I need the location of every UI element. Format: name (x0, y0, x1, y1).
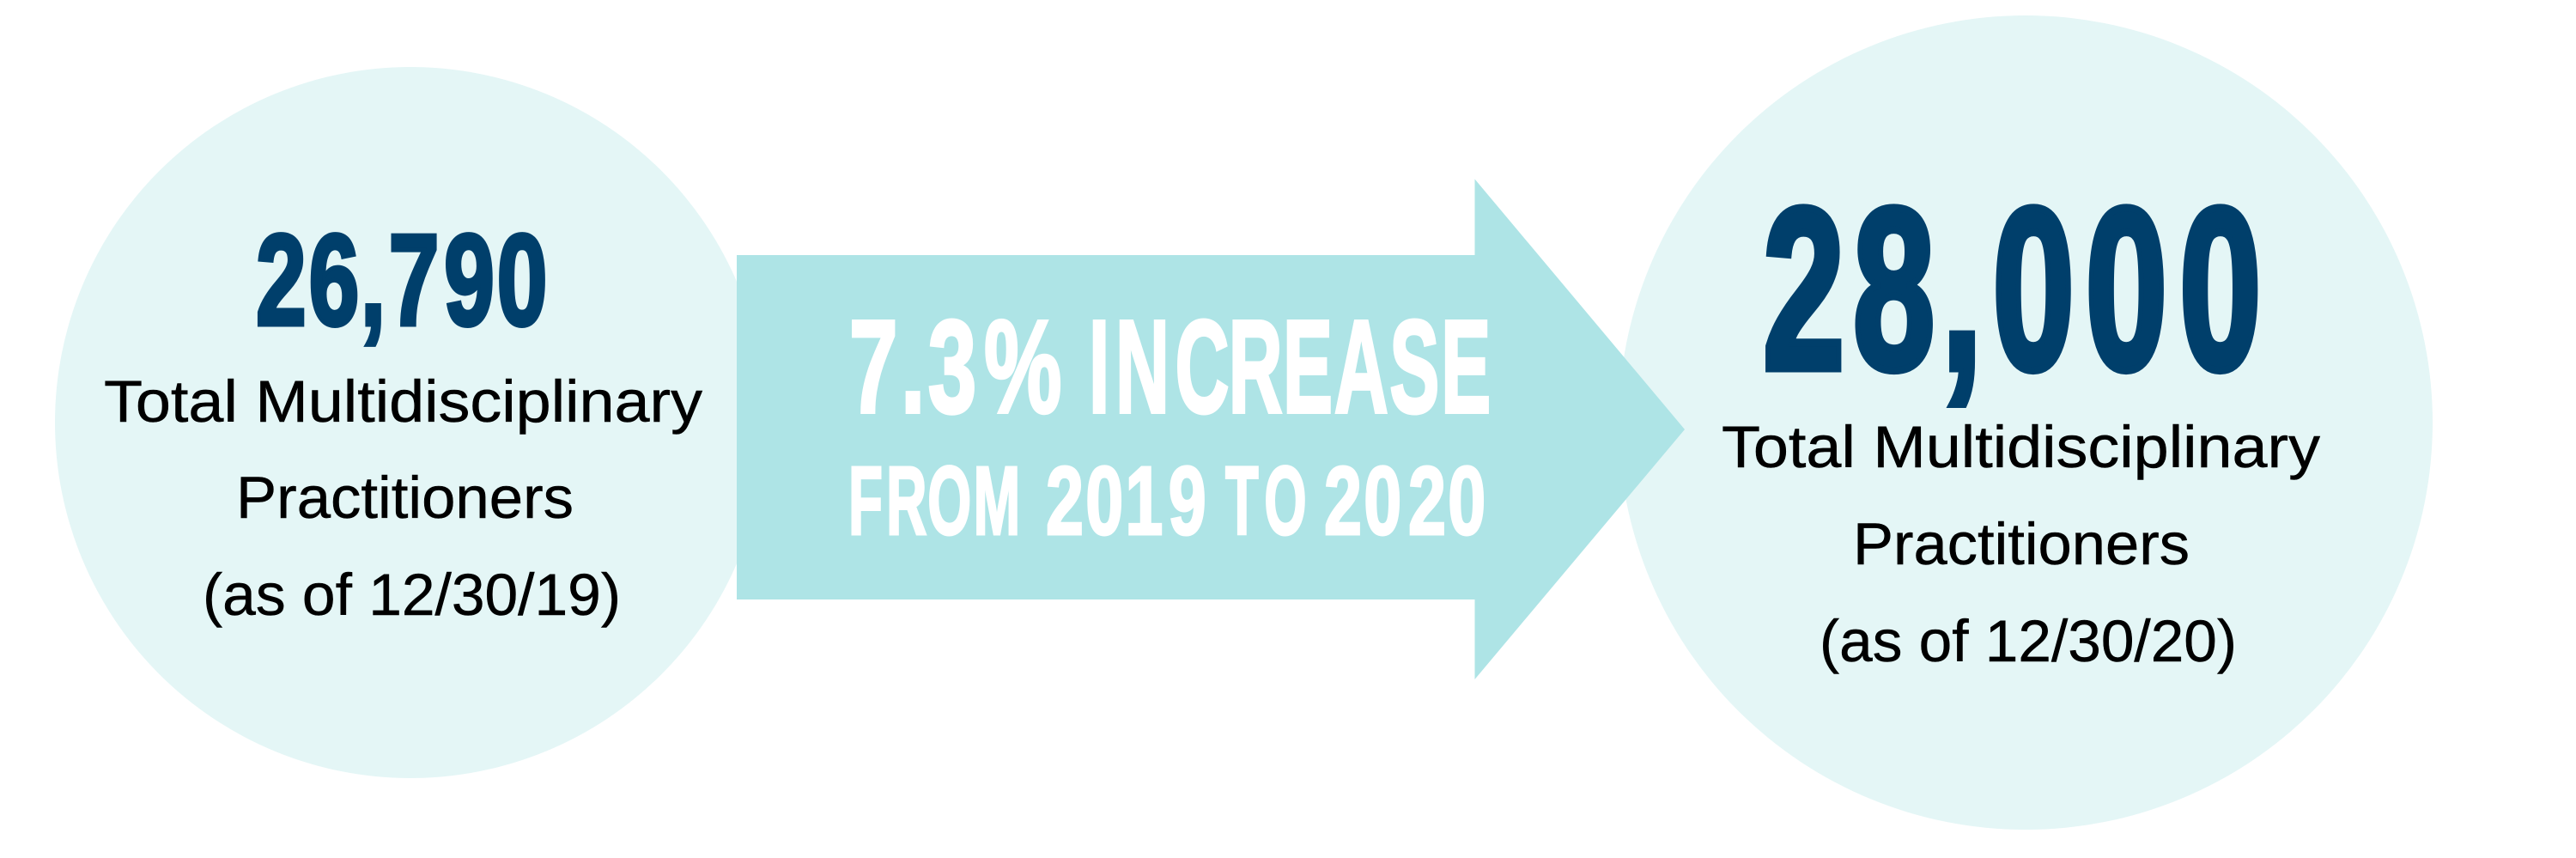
panel: 2020 circle (1619, 15, 2433, 830)
circle background 2019 (55, 67, 766, 778)
2019 count: 26,790 (256, 207, 547, 352)
panel: 2019 circle (55, 67, 766, 778)
arrow subheading: TO (1225, 447, 1307, 556)
2020 description: (as of 12/30/20) (1820, 608, 2237, 674)
arrow headline (849, 293, 1491, 441)
2020 description (1722, 414, 2321, 674)
arrow shape (737, 179, 1685, 679)
arrow subheading: 2019 (1046, 447, 1206, 555)
arrow: increase from 2019 to 2020 (737, 179, 1685, 679)
arrow subheading: 2020 (1324, 447, 1485, 555)
2019 description: Practitioners (236, 465, 574, 531)
circle background 2020 (1619, 15, 2433, 830)
2020 description: Total Multidisciplinary (1722, 414, 2321, 480)
2019 description: (as of 12/30/19) (203, 562, 621, 628)
2019 description (104, 368, 703, 628)
2019 description: Total Multidisciplinary (104, 368, 703, 435)
arrow headline: 7.3% (849, 293, 1061, 441)
2020 description: Practitioners (1853, 511, 2190, 577)
arrow subheading (848, 446, 1485, 556)
2020 count: 28,000 (1763, 160, 2262, 417)
arrow headline: INCREASE (1089, 293, 1491, 441)
arrow subheading: FROM (848, 446, 1020, 555)
